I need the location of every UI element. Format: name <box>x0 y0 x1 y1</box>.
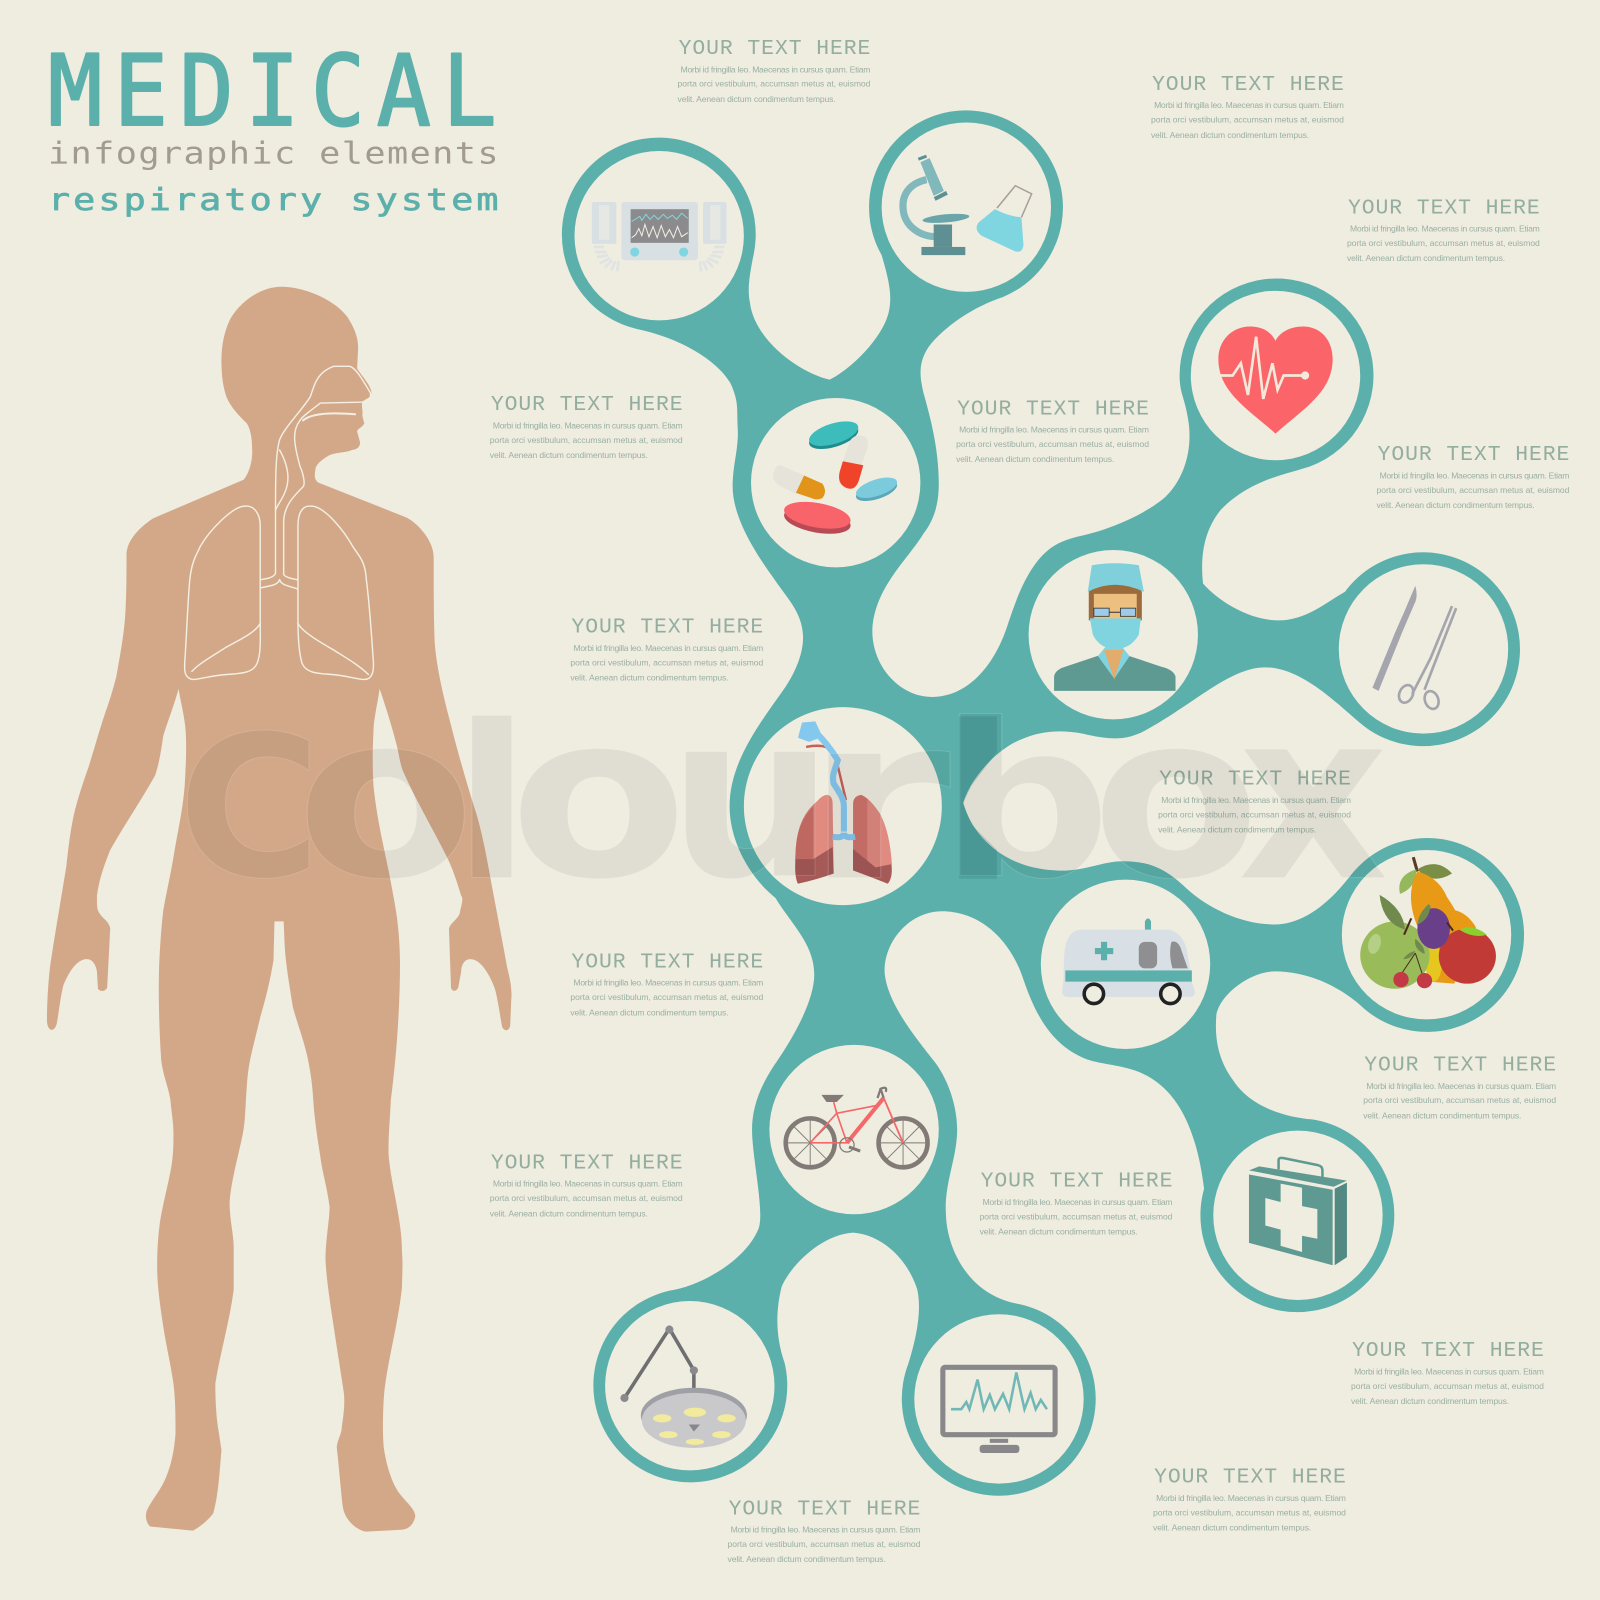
text block 5: Morbi id fringilla leo. Maecenas in cursus quam. Etiam <box>493 421 683 431</box>
text block 7: velit. Aenean dictum condimentum tempus. <box>570 673 729 683</box>
watermark: colourbox: C <box>178 695 321 923</box>
text block 10: velit. Aenean dictum condimentum tempus. <box>1363 1110 1521 1120</box>
text block 3 <box>1347 196 1540 263</box>
text block 15: porta orci vestibulum, accumsan metus at, euismod <box>728 1539 921 1549</box>
icon: scalpel and forceps <box>1372 586 1456 711</box>
text block 14 <box>1153 1466 1346 1533</box>
text block 1: velit. Aenean dictum condimentum tempus. <box>678 94 836 104</box>
text block 9: porta orci vestibulum, accumsan metus at, euismod <box>570 992 763 1002</box>
text block 15: Morbi id fringilla leo. Maecenas in cursus quam. Etiam <box>731 1525 920 1535</box>
icon: defibrillator monitor <box>592 202 727 271</box>
text block 1: Morbi id fringilla leo. Maecenas in cursus quam. Etiam <box>681 64 870 74</box>
subheading: infographic elements: infographic elements <box>48 134 499 171</box>
text block 3: Morbi id fringilla leo. Maecenas in cursus quam. Etiam <box>1350 224 1540 234</box>
watermark: colourbox: o <box>296 667 476 930</box>
watermark: colourbox: u <box>667 667 835 930</box>
text block 14: YOUR TEXT HERE <box>1154 1466 1346 1490</box>
icon: first aid kit <box>1249 1158 1347 1265</box>
icon: microscope and flask <box>903 156 1032 255</box>
icon: lungs <box>795 721 892 884</box>
icon: bicycle <box>786 1088 928 1167</box>
title: MEDICAL infographic elements respiratory system <box>48 35 499 217</box>
text block 10 <box>1363 1053 1556 1120</box>
heading: MEDICAL: MEDICAL <box>48 35 497 149</box>
text block 9: Morbi id fringilla leo. Maecenas in cursus quam. Etiam <box>573 978 763 988</box>
text block 14: porta orci vestibulum, accumsan metus at, euismod <box>1153 1507 1346 1517</box>
text block 5: porta orci vestibulum, accumsan metus at, euismod <box>490 435 683 445</box>
text block 3: YOUR TEXT HERE <box>1348 196 1540 220</box>
text block 4: YOUR TEXT HERE <box>1378 443 1569 467</box>
watermark: colourbox: b <box>940 679 1111 927</box>
text block 15 <box>728 1497 921 1564</box>
icon: surgical lamp <box>620 1326 747 1448</box>
text block 6: porta orci vestibulum, accumsan metus at, euismod <box>956 439 1149 449</box>
text block 5: YOUR TEXT HERE <box>491 393 683 417</box>
text block 7: YOUR TEXT HERE <box>571 616 763 640</box>
text block 2: YOUR TEXT HERE <box>1152 73 1344 97</box>
text block 14: velit. Aenean dictum condimentum tempus. <box>1153 1523 1311 1533</box>
watermark: colourbox: r <box>803 669 951 932</box>
text block 4: velit. Aenean dictum condimentum tempus. <box>1377 500 1535 510</box>
icon: doctor with mask <box>1054 563 1176 691</box>
icon: pills and capsules <box>773 416 899 538</box>
text block 5 <box>490 393 683 460</box>
text block 8: YOUR TEXT HERE <box>1159 768 1351 792</box>
text block 13: porta orci vestibulum, accumsan metus at, euismod <box>1351 1381 1544 1391</box>
text block 6: Morbi id fringilla leo. Maecenas in cursus quam. Etiam <box>959 425 1149 435</box>
network: teal blob connecting all circles <box>562 110 1524 1496</box>
icon: heart with ECG line <box>1218 327 1333 434</box>
icon: ambulance <box>1062 918 1195 1004</box>
text block 12: velit. Aenean dictum condimentum tempus. <box>980 1227 1138 1237</box>
text block 11: porta orci vestibulum, accumsan metus at, euismod <box>490 1193 683 1203</box>
text block 6 <box>956 397 1149 464</box>
text block 6: YOUR TEXT HERE <box>957 397 1149 421</box>
text block 8: velit. Aenean dictum condimentum tempus. <box>1158 825 1316 835</box>
text block 7 <box>570 616 763 683</box>
text block 15: velit. Aenean dictum condimentum tempus. <box>728 1554 886 1564</box>
text block 13 <box>1351 1339 1544 1406</box>
text block 9 <box>570 950 763 1017</box>
text block 7: porta orci vestibulum, accumsan metus at, euismod <box>570 657 763 667</box>
text block 14: Morbi id fringilla leo. Maecenas in cursus quam. Etiam <box>1156 1493 1346 1503</box>
text block 2 <box>1151 73 1344 140</box>
text block 3: porta orci vestibulum, accumsan metus at, euismod <box>1347 238 1540 248</box>
text block 3: velit. Aenean dictum condimentum tempus. <box>1347 253 1505 263</box>
watermark: colourbox: l <box>453 681 531 929</box>
text block 12: porta orci vestibulum, accumsan metus at, euismod <box>980 1211 1173 1221</box>
text block 15: YOUR TEXT HERE <box>729 1497 920 1521</box>
subheading: respiratory system: respiratory system <box>48 182 499 217</box>
text block 1: porta orci vestibulum, accumsan metus at, euismod <box>678 79 871 89</box>
watermark: colourbox: x <box>1238 661 1389 934</box>
text block 11: Morbi id fringilla leo. Maecenas in cursus quam. Etiam <box>493 1179 683 1189</box>
text block 12 <box>980 1170 1173 1237</box>
text block 9: velit. Aenean dictum condimentum tempus. <box>570 1007 729 1017</box>
watermark: colourbox: o <box>509 667 688 930</box>
text block 9: YOUR TEXT HERE <box>571 950 763 974</box>
icon: fruit pile <box>1360 857 1496 989</box>
text block 1 <box>678 37 871 104</box>
text block 12: YOUR TEXT HERE <box>981 1170 1172 1194</box>
text block 4 <box>1377 443 1570 510</box>
watermark: colourbox <box>178 661 1389 934</box>
text block 4: Morbi id fringilla leo. Maecenas in cursus quam. Etiam <box>1380 471 1569 481</box>
text block 4: porta orci vestibulum, accumsan metus at, euismod <box>1377 485 1570 495</box>
text block 5: velit. Aenean dictum condimentum tempus. <box>490 450 648 460</box>
text block 8: porta orci vestibulum, accumsan metus at, euismod <box>1158 809 1351 819</box>
icon: vital signs monitor <box>943 1367 1055 1453</box>
text block 1: YOUR TEXT HERE <box>679 37 870 61</box>
text block 8 <box>1158 768 1351 835</box>
text block 8: Morbi id fringilla leo. Maecenas in cursus quam. Etiam <box>1161 795 1351 805</box>
text block 2: velit. Aenean dictum condimentum tempus. <box>1151 130 1309 140</box>
text block 13: Morbi id fringilla leo. Maecenas in cursus quam. Etiam <box>1354 1366 1544 1376</box>
inner circles of the network <box>574 122 1511 1484</box>
human body figure with respiratory system <box>47 287 511 1532</box>
text block 10: YOUR TEXT HERE <box>1364 1053 1556 1077</box>
text block 7: Morbi id fringilla leo. Maecenas in cursus quam. Etiam <box>573 643 763 653</box>
text block 10: Morbi id fringilla leo. Maecenas in cursus quam. Etiam <box>1366 1081 1556 1091</box>
text block 2: porta orci vestibulum, accumsan metus at, euismod <box>1151 114 1344 124</box>
text block 2: Morbi id fringilla leo. Maecenas in cursus quam. Etiam <box>1154 100 1344 110</box>
text block 6: velit. Aenean dictum condimentum tempus. <box>956 454 1114 464</box>
text block 13: velit. Aenean dictum condimentum tempus. <box>1351 1396 1509 1406</box>
body silhouette <box>47 287 511 1532</box>
text block 12: Morbi id fringilla leo. Maecenas in cursus quam. Etiam <box>983 1197 1172 1207</box>
text block 11 <box>490 1151 683 1218</box>
text block 11: YOUR TEXT HERE <box>491 1151 683 1175</box>
airway and lungs outline <box>185 366 373 679</box>
text block 11: velit. Aenean dictum condimentum tempus. <box>490 1208 648 1218</box>
watermark: colourbox: o <box>1092 667 1260 930</box>
text block 10: porta orci vestibulum, accumsan metus at, euismod <box>1363 1095 1556 1105</box>
text block 13: YOUR TEXT HERE <box>1352 1339 1544 1363</box>
